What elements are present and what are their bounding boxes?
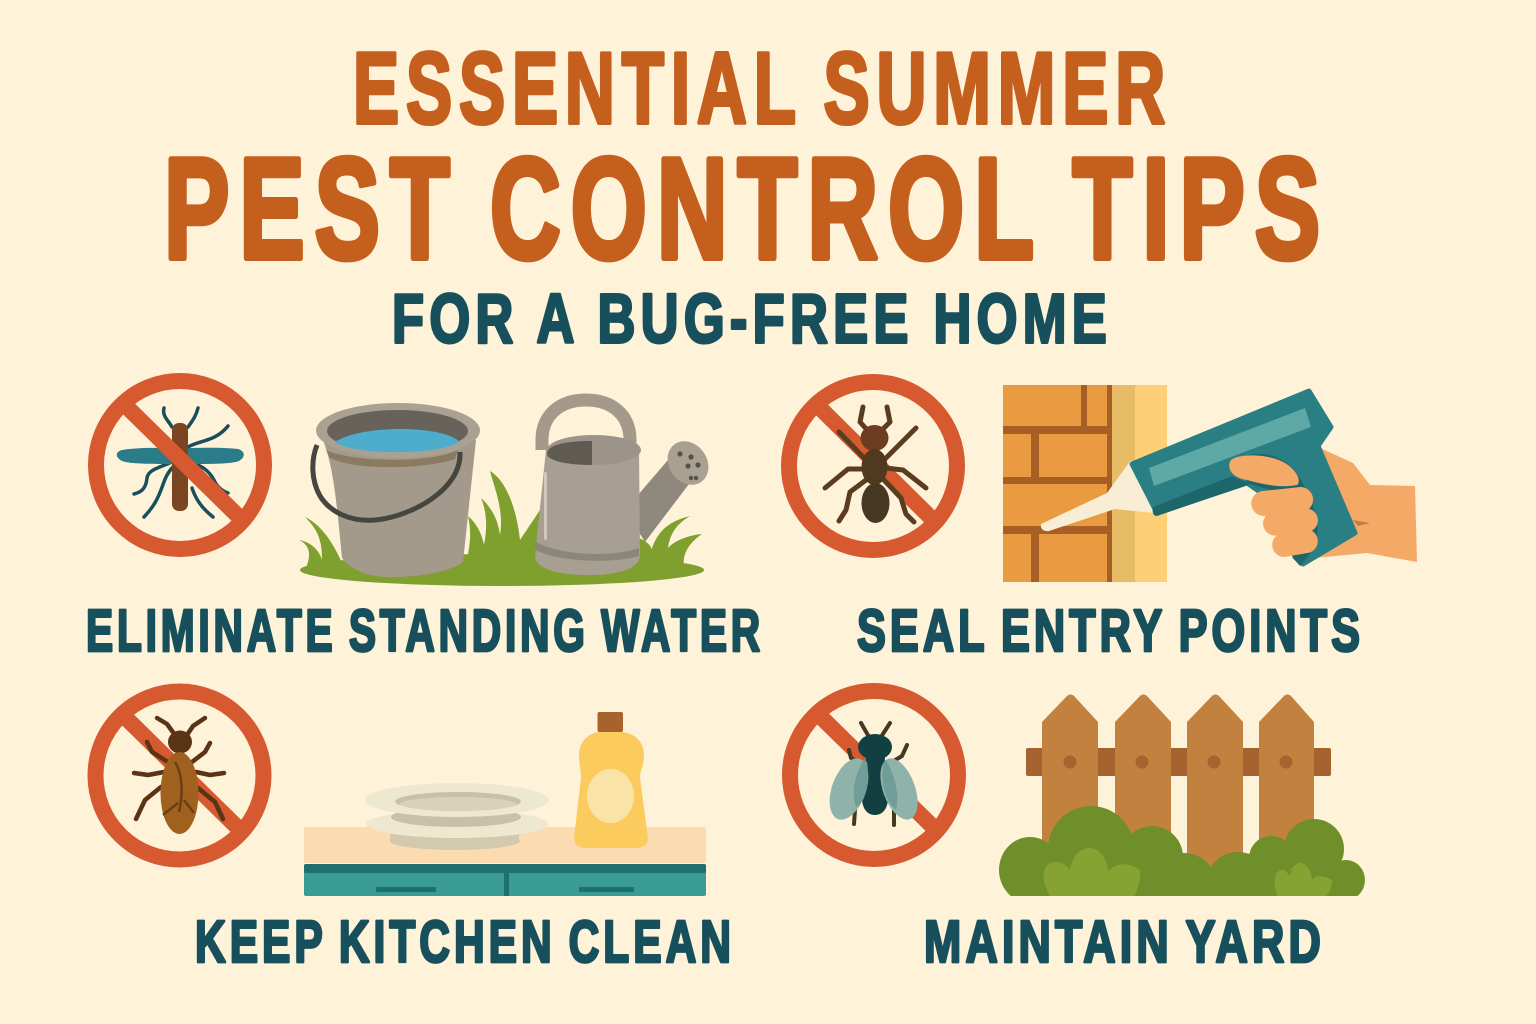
- bush highlights: [1044, 848, 1332, 896]
- panel: maintain yard: [790, 691, 1365, 975]
- title: [164, 33, 1330, 358]
- can handle: [542, 400, 630, 450]
- hand and arm: [1314, 447, 1417, 562]
- illustration: brick wall with caulk gun: [1003, 385, 1417, 582]
- subtitle: FOR A BUG-FREE HOME: [392, 280, 1112, 358]
- cabinet: [304, 864, 706, 896]
- can body: [535, 450, 640, 575]
- illustration: fence and bushes: [999, 694, 1365, 917]
- bucket body: [323, 440, 476, 577]
- water: [335, 429, 459, 452]
- soap bottle: [574, 712, 648, 848]
- bucket handle: [313, 445, 460, 520]
- fence pickets: [1042, 694, 1314, 870]
- fingers: [1229, 455, 1320, 559]
- icon: no fly: [790, 691, 958, 859]
- brick wall: [1003, 385, 1167, 582]
- grass: [299, 471, 704, 586]
- icon: no cockroach: [96, 692, 264, 860]
- icon: no ant: [789, 382, 957, 550]
- label: maintain yard: MAINTAIN YARD: [924, 909, 1325, 975]
- panel: seal entry points: [789, 382, 1417, 664]
- label: eliminate standing water: ELIMINATE STANDING WATER: [86, 598, 764, 664]
- illustration: counter with plates and soap: [304, 712, 706, 896]
- panel: keep kitchen clean: [96, 692, 735, 975]
- title line 1: ESSENTIAL SUMMER: [353, 33, 1172, 145]
- icon: watering can and bucket on grass: [299, 400, 717, 586]
- plates: [365, 783, 549, 850]
- fence rail: [1026, 748, 1331, 776]
- label: seal entry points: SEAL ENTRY POINTS: [857, 598, 1364, 664]
- panel: eliminate standing water: [86, 381, 764, 664]
- bushes: [999, 806, 1365, 896]
- wings: [822, 753, 925, 825]
- caulk nozzle: [1041, 460, 1155, 531]
- label: keep kitchen clean: KEEP KITCHEN CLEAN: [195, 909, 735, 975]
- spout: [621, 433, 717, 551]
- icon: no mosquito: [96, 381, 264, 549]
- counter top: [304, 827, 706, 863]
- caulk gun: [1132, 391, 1355, 566]
- bucket rim: [316, 403, 480, 458]
